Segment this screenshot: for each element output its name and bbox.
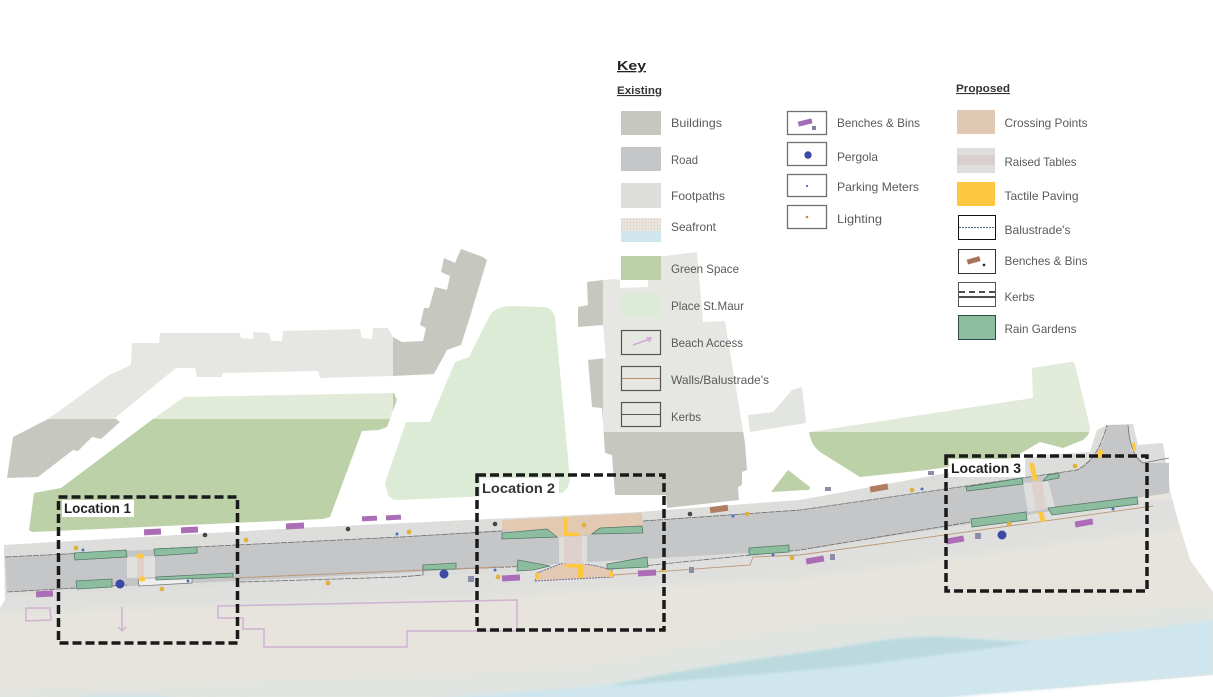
key: place st maur: Place St.Maur xyxy=(671,299,744,313)
key: proposed balustrades: Balustrade's xyxy=(1004,223,1070,237)
raised table: location 1 xyxy=(127,556,155,578)
key: raised tables: Raised Tables xyxy=(1004,155,1076,169)
key: rain gardens xyxy=(958,316,1076,340)
water: sand haze xyxy=(0,606,1213,697)
green space: triangle xyxy=(771,470,810,492)
road xyxy=(5,425,1169,592)
pergolas xyxy=(116,530,1006,588)
key: parking meters xyxy=(788,174,919,196)
raised table: location 3 xyxy=(1023,481,1055,512)
key: tactile paving xyxy=(957,182,1078,206)
location 3 box: Location 3 xyxy=(951,461,1022,476)
tactile paving xyxy=(136,443,1136,582)
crossing: location 2 north xyxy=(502,513,643,537)
proposed bins xyxy=(203,512,692,537)
building: northern terrace xyxy=(7,249,487,478)
key: buildings: Buildings xyxy=(671,116,722,130)
location 2 box: Location 2 xyxy=(482,481,555,496)
key: proposed benches and bins xyxy=(958,250,1088,274)
key: beach access: Beach Access xyxy=(671,336,743,350)
rain gardens xyxy=(74,473,1138,589)
key: walls and balustrades: Walls/Balustrade's xyxy=(671,373,769,387)
map: site plan xyxy=(0,249,1213,697)
key: beach access xyxy=(622,330,743,354)
water: deep band xyxy=(606,637,1032,687)
key: buildings xyxy=(621,111,722,135)
location 1 box: Location 1 xyxy=(64,501,131,516)
key: footpaths: Footpaths xyxy=(671,189,725,203)
location 3 box xyxy=(946,456,1147,591)
ground: upper footpath xyxy=(4,424,1170,596)
heading: existing: Existing xyxy=(617,85,662,97)
key: pergola xyxy=(788,142,878,166)
key: proposed balustrades xyxy=(958,216,1070,240)
key: parking meters: Parking Meters xyxy=(837,180,919,194)
key: proposed benches and bins: Benches & Bins xyxy=(1004,254,1088,268)
key: crossing points: Crossing Points xyxy=(1004,116,1088,130)
crossing: location 2 south xyxy=(535,563,613,581)
water: left tint xyxy=(62,695,180,697)
key: benches and bins: Benches & Bins xyxy=(837,116,920,130)
key: proposed kerbs xyxy=(958,282,1034,306)
key: kerbs: Kerbs xyxy=(671,410,701,424)
proposed benches xyxy=(710,483,888,513)
key: tactile paving: Tactile Paving xyxy=(1004,189,1078,203)
ground: lower footpath band xyxy=(0,501,1176,608)
key: green space xyxy=(621,256,739,280)
key: seafront: Seafront xyxy=(671,220,717,234)
key: lighting xyxy=(788,206,882,228)
key: crossing points xyxy=(957,110,1088,134)
white fade over upper map, west xyxy=(0,0,393,419)
beach access routes xyxy=(26,600,517,647)
Place St. Maur xyxy=(385,306,570,500)
location 1 box xyxy=(58,497,238,643)
key: lighting: Lighting xyxy=(837,212,882,226)
key: pergola: Pergola xyxy=(837,150,878,164)
kerb and balustrade lines xyxy=(5,425,1169,592)
key: road: Road xyxy=(671,153,698,167)
green space: east lawn xyxy=(809,362,1090,477)
key: rain gardens: Rain Gardens xyxy=(1004,322,1076,336)
parking meters xyxy=(82,488,1114,582)
building: central block xyxy=(578,252,747,508)
key: proposed kerbs: Kerbs xyxy=(1004,290,1034,304)
key heading: Key xyxy=(617,58,647,73)
heading: proposed: Proposed xyxy=(956,83,1010,95)
key: benches and bins xyxy=(788,112,920,134)
water: shallow xyxy=(420,620,1213,697)
benches xyxy=(36,515,1093,597)
key: walls and balustrades xyxy=(622,366,769,390)
key: road xyxy=(621,147,698,171)
key: place st maur xyxy=(621,293,744,317)
small pavilion xyxy=(748,387,806,432)
location 2 box xyxy=(477,475,664,630)
raised table: location 2 xyxy=(559,536,587,564)
lighting xyxy=(74,464,1077,591)
green space: west lawn xyxy=(29,393,397,532)
ground: sand xyxy=(0,424,1213,697)
key: seafront xyxy=(621,218,717,242)
key: raised tables xyxy=(957,148,1076,173)
white fade over upper map, east xyxy=(603,0,1213,432)
key: green space: Green Space xyxy=(671,262,739,276)
key: footpaths xyxy=(621,183,725,208)
key: kerbs xyxy=(622,402,701,426)
bins xyxy=(468,471,981,582)
